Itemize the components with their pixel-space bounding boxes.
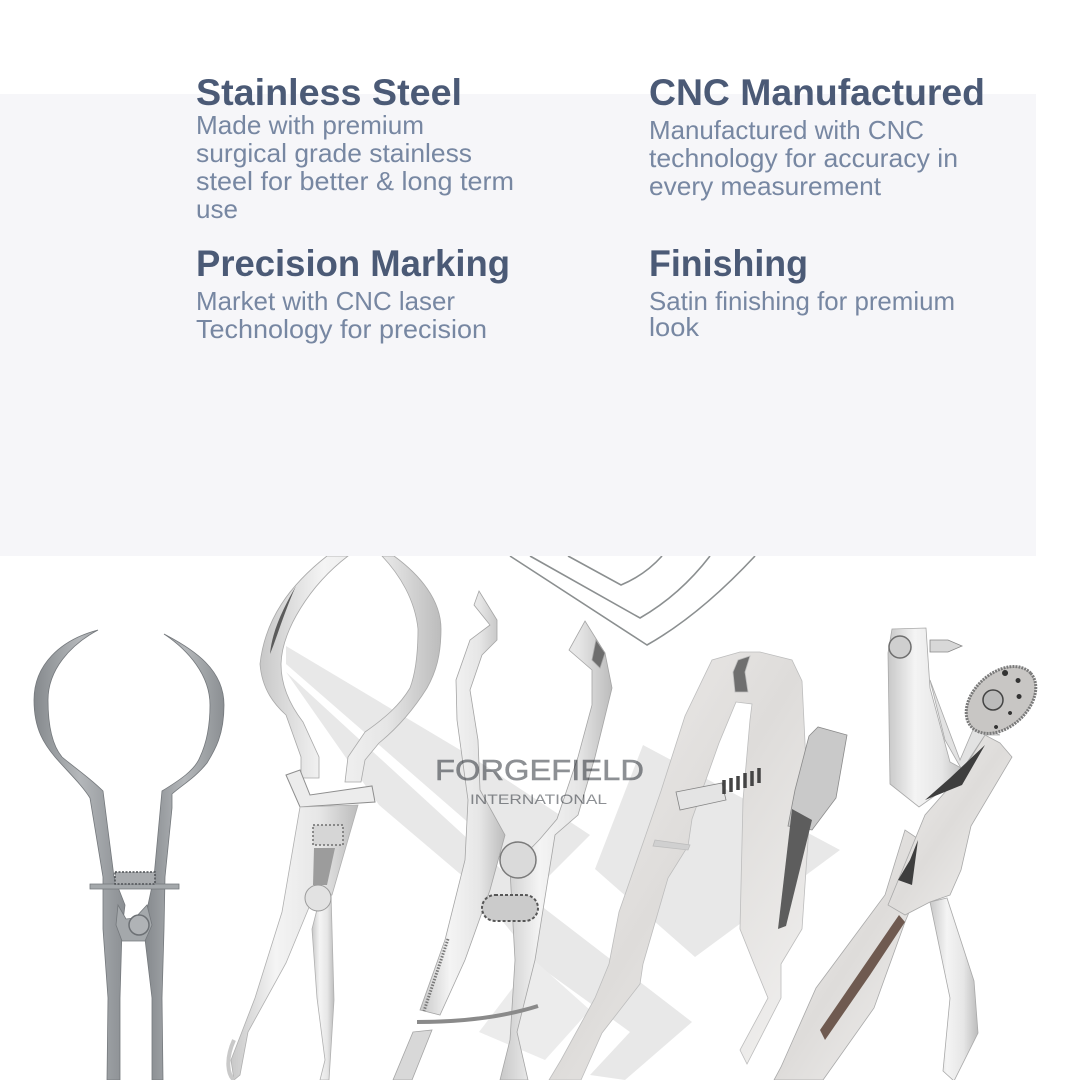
ratchet bar xyxy=(417,1006,538,1022)
description: look xyxy=(649,312,700,342)
feature: finishing xyxy=(649,243,955,342)
description: steel for better & long term xyxy=(196,166,514,196)
pivot xyxy=(500,842,536,878)
brand name: FORGEFIELD xyxy=(435,755,644,787)
upper jaw xyxy=(888,735,1012,915)
lower left handle xyxy=(774,830,935,1080)
description: Satin finishing for premium xyxy=(649,286,955,316)
description: Made with premium xyxy=(196,110,424,140)
dark gaps xyxy=(898,745,985,885)
step collar xyxy=(653,840,690,850)
logo band lower xyxy=(286,672,692,1080)
heading: Precision Marking xyxy=(196,243,510,284)
wheel centre screw xyxy=(983,690,1003,710)
watermark wordmark xyxy=(435,755,644,807)
description: Market with CNC laser xyxy=(196,286,455,316)
wheel plate xyxy=(788,727,847,830)
screw xyxy=(889,636,911,658)
instrument 3: clamp pliers with coil xyxy=(393,591,612,1080)
description xyxy=(196,286,487,344)
ring xyxy=(260,556,441,782)
spring xyxy=(313,825,343,845)
punch wheel xyxy=(953,653,1049,747)
pivot xyxy=(305,885,331,911)
brand subtitle: INTERNATIONAL xyxy=(470,791,607,807)
instrument 5: rotary rubber dam punch xyxy=(774,628,1049,1080)
spring strip to wheel xyxy=(930,680,1000,770)
description xyxy=(649,115,958,201)
description: Manufactured with CNC xyxy=(649,115,924,145)
description: Technology for precision xyxy=(196,314,487,344)
heading: CNC Manufactured xyxy=(649,72,985,113)
watermark logo xyxy=(286,646,840,1080)
clip band xyxy=(286,770,375,807)
pin xyxy=(930,640,962,652)
lower left leg xyxy=(393,1030,432,1080)
dark reflection xyxy=(270,586,296,654)
spring coil xyxy=(115,872,155,884)
description xyxy=(196,110,514,224)
feature: stainless steel xyxy=(196,72,514,224)
hinge dark xyxy=(733,656,750,692)
description: technology for accuracy in xyxy=(649,143,958,173)
coil spring xyxy=(482,895,538,921)
description xyxy=(649,286,955,342)
jaw tip shadow xyxy=(592,640,605,668)
instrument 2: shiny ring forceps xyxy=(228,556,441,1080)
wheel holes xyxy=(994,670,1022,729)
logo band upper xyxy=(286,646,590,885)
heading: Finishing xyxy=(649,243,808,284)
roller cylinder xyxy=(676,783,726,810)
heading: Stainless Steel xyxy=(196,72,462,113)
lower loop xyxy=(228,1040,234,1080)
spring xyxy=(724,768,759,794)
left handle xyxy=(231,805,358,1080)
logo lower wedge xyxy=(479,960,590,1060)
description: use xyxy=(196,194,238,224)
feature: CNC manufactured xyxy=(649,72,985,201)
description: surgical grade stainless xyxy=(196,138,472,168)
instrument 1: dark clamp forceps xyxy=(34,630,224,1080)
right handle xyxy=(312,890,334,1080)
description: every measurement xyxy=(649,171,882,201)
crossbar and bridge xyxy=(90,884,179,941)
feature: precision marking xyxy=(196,243,510,344)
upper block xyxy=(888,628,965,807)
logo diamond xyxy=(595,745,840,957)
dark slot xyxy=(778,809,812,929)
icon: retractor frame wire xyxy=(510,556,755,645)
handle reflection xyxy=(820,915,905,1040)
panel: features background xyxy=(0,94,1036,556)
lower right handle xyxy=(930,898,978,1080)
pivot screw xyxy=(129,915,149,935)
instrument 4: punch forceps xyxy=(549,652,847,1080)
slot xyxy=(313,848,335,885)
teeth xyxy=(424,939,448,1011)
